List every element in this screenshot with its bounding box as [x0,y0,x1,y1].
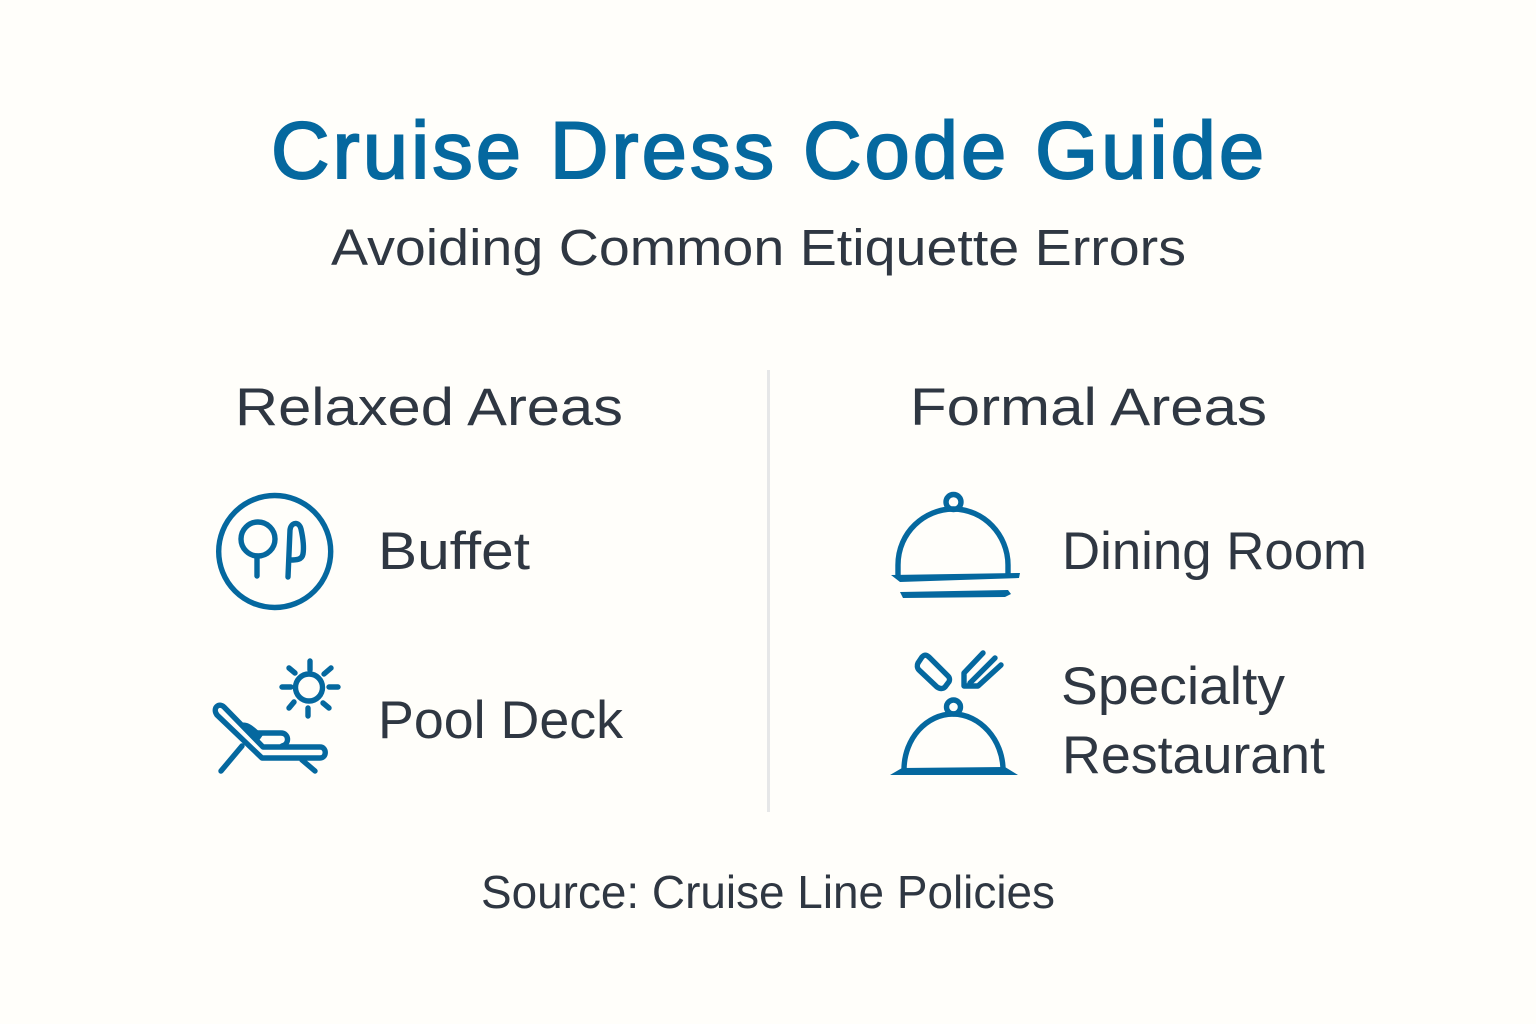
label: specialty restaurant: Restaurant [1062,726,1325,785]
heading: formal areas: Formal Areas [910,378,1267,437]
panel: relaxed areas [215,378,623,771]
label: dining room: Dining Room [1062,522,1367,581]
heading: relaxed areas: Relaxed Areas [235,378,623,437]
icon: specialty restaurant cloche with cutlery [890,653,1018,775]
panel: formal areas [890,378,1367,785]
label: specialty restaurant [1061,657,1325,785]
title: Cruise Dress Code Guide [271,106,1264,196]
source note: Source: Cruise Line Policies [481,866,1055,918]
subtitle: Avoiding Common Etiquette Errors [331,219,1186,276]
label: specialty restaurant: Specialty [1061,657,1286,716]
label: buffet: Buffet [378,522,530,581]
icon: dining room cloche [891,494,1020,598]
label: pool deck: Pool Deck [378,691,623,750]
icon: buffet spoon and knife [219,496,331,608]
icon: pool deck lounger and sun [215,661,338,771]
